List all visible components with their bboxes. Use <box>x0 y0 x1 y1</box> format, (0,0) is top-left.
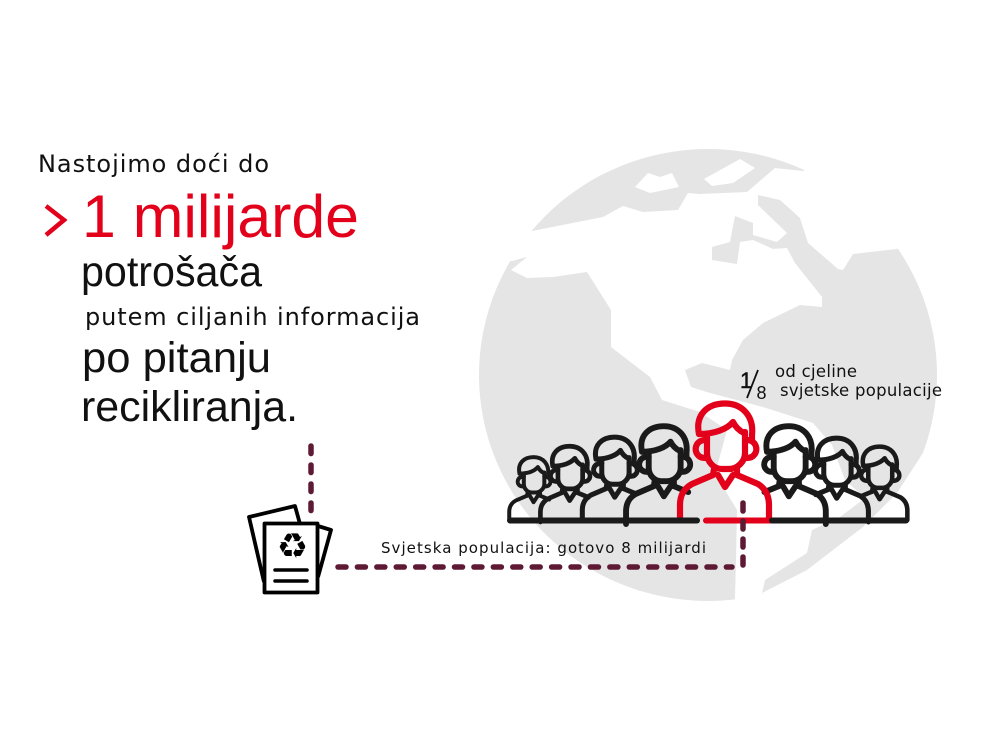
person: far left <box>509 457 550 520</box>
text: recikliranja: recikliranja. <box>81 383 298 431</box>
person: third left <box>582 437 637 521</box>
globe <box>479 149 960 640</box>
person: second right <box>816 438 868 522</box>
crowd of people <box>509 404 907 524</box>
label: world population: Svjetska populacija: gotovo 8 milijardi <box>381 539 706 557</box>
label: svjetske populacije: svjetske populacije <box>780 381 942 400</box>
person: second left <box>540 446 590 522</box>
person: far right <box>861 447 907 520</box>
land: the Americas <box>490 150 950 620</box>
fraction: one eighth <box>740 368 767 403</box>
dashed connector: from text to documents <box>308 446 314 512</box>
label: od cjeline: od cjeline <box>775 362 857 381</box>
headline: 1 milijarde: 1 milijarde <box>82 183 359 250</box>
heading: intro line: Nastojimo doći do <box>38 150 269 178</box>
person: fourth left <box>626 426 690 524</box>
fraction: one eighth: 1 <box>740 368 752 393</box>
baseline: right black <box>772 518 906 524</box>
text: po pitanju: po pitanju <box>82 334 271 382</box>
text: potrošača: potrošača <box>81 248 262 296</box>
fraction: one eighth: 8 <box>756 383 767 403</box>
icon: red chevron <box>46 206 64 235</box>
dashed connector: documents to person <box>338 503 743 568</box>
text: putem ciljanih informacija: putem ciljanih informacija <box>85 303 420 331</box>
icon: recycling symbol: ♻ <box>277 527 308 567</box>
person: third right <box>764 426 826 524</box>
person: red highlighted <box>680 404 772 520</box>
icon: recycled paper documents <box>249 506 331 592</box>
baseline: left black <box>510 518 697 524</box>
